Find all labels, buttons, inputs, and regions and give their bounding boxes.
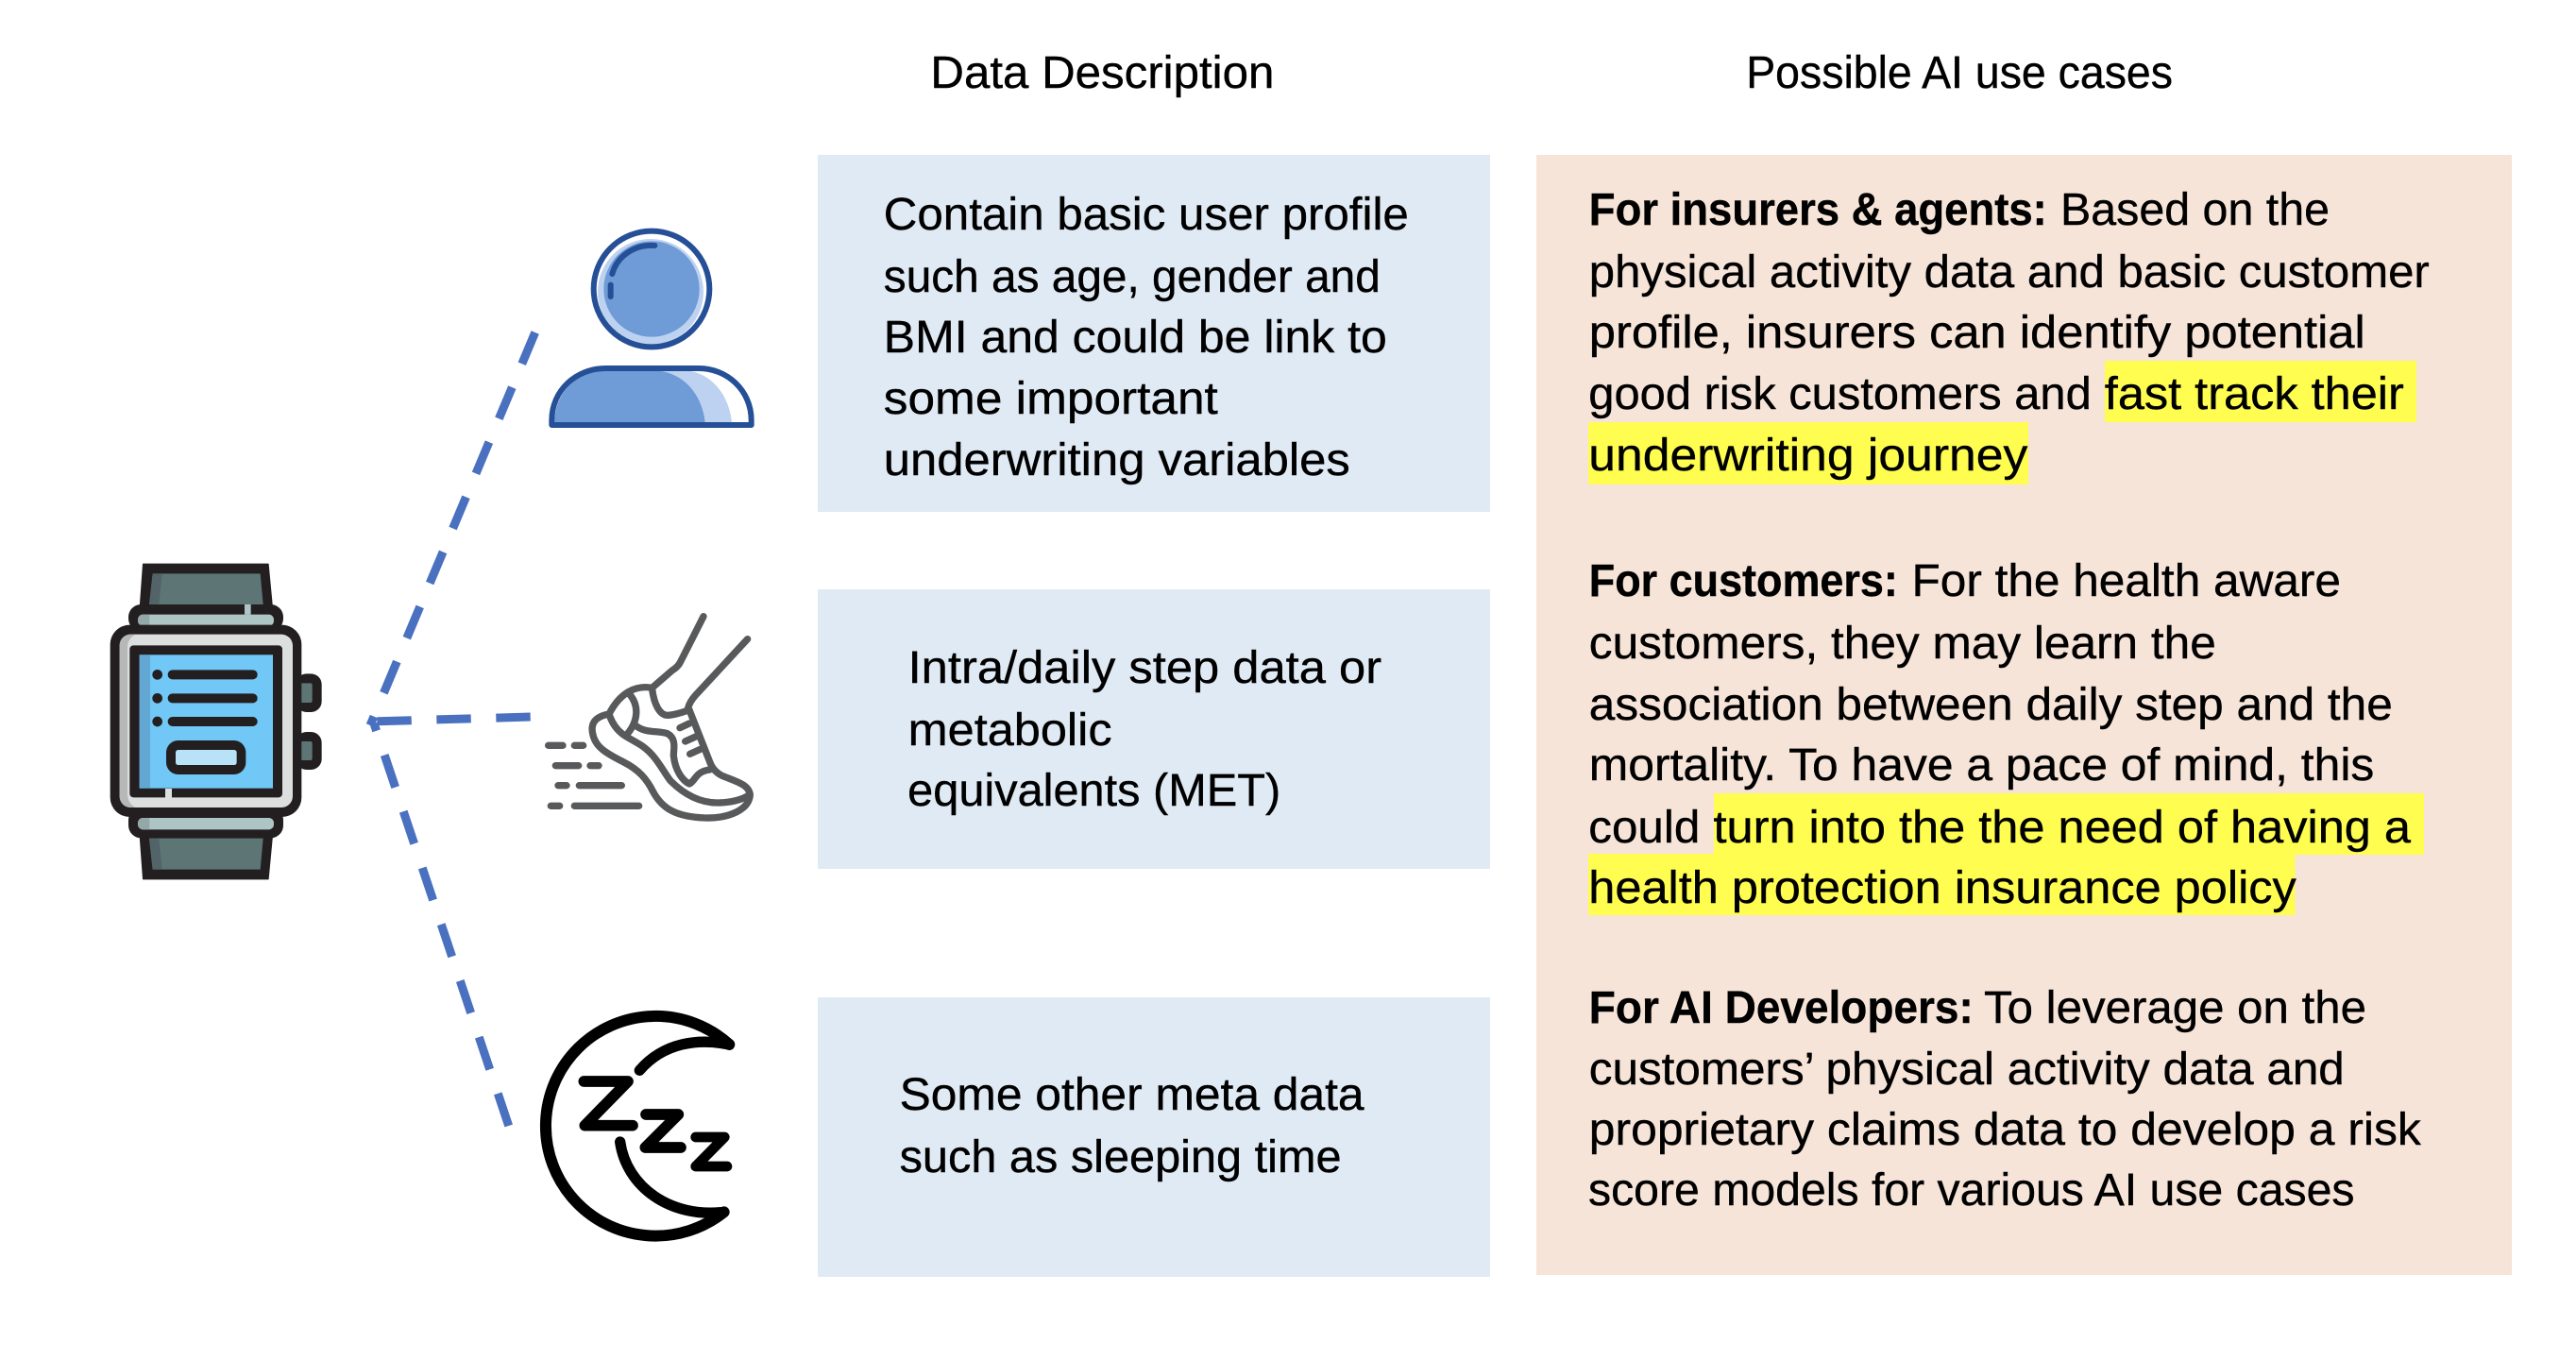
panel: meta data description	[818, 997, 1490, 1277]
panel: user profile description: BMI and could be link to	[884, 312, 1387, 363]
icon: running shoe	[549, 617, 750, 818]
text block: for insurers and agents: underwriting journey	[1588, 430, 2028, 481]
panel: step data description: metabolic	[908, 705, 1112, 756]
panel: user profile description: underwriting variables	[884, 434, 1350, 485]
icon: smartwatch	[110, 564, 322, 879]
panel: possible AI use cases	[1536, 155, 2512, 1275]
panel: step data description: equivalents (MET)	[907, 765, 1280, 816]
text block: for customers: association between daily step and the	[1589, 679, 2393, 730]
panel: step data description: Intra/daily step data or	[908, 642, 1381, 693]
heading: Possible AI use cases: Possible AI use cases	[1746, 47, 2173, 98]
text block: for AI developers: proprietary claims data to develop a risk	[1589, 1104, 2422, 1155]
panel: user profile description: such as age, gender and	[884, 251, 1381, 302]
text block: for customers: For customers:	[1589, 555, 1898, 606]
text block: for insurers and agents: physical activity data and basic customer	[1589, 246, 2430, 298]
panel: meta data description: such as sleeping time	[900, 1131, 1342, 1182]
text block: for AI developers: For AI Developers:	[1589, 982, 1974, 1033]
icon: sleeping moon	[546, 1016, 729, 1236]
text block: for insurers and agents	[1588, 184, 2430, 484]
panel: user profile description: some important	[884, 373, 1218, 424]
text block: for AI developers: customers’ physical activity data and	[1589, 1044, 2345, 1095]
text block: for insurers and agents: Based on the	[2060, 184, 2330, 235]
text block: for insurers and agents: fast track their	[2105, 368, 2404, 419]
heading: Data Description: Data Description	[930, 47, 1274, 98]
text block: for insurers and agents: profile, insurers can identify potential	[1589, 307, 2365, 358]
text block: for AI developers	[1588, 982, 2422, 1216]
text block: for customers: turn into the the need of having a	[1713, 802, 2411, 853]
text block: for customers: could	[1588, 802, 1700, 853]
text block: for customers: mortality. To have a pace of mind, this	[1589, 740, 2374, 790]
text block: for customers	[1588, 555, 2424, 915]
panel: user profile description	[818, 155, 1490, 512]
text block: for AI developers: score models for various AI use cases	[1588, 1164, 2355, 1216]
text block: for insurers and agents: good risk customers and	[1588, 368, 2092, 419]
text block: for AI developers: To leverage on the	[1984, 982, 2366, 1033]
text block: for customers: health protection insurance policy	[1588, 862, 2297, 913]
panel: meta data description: Some other meta data	[900, 1069, 1364, 1120]
text block: for customers: For the health aware	[1911, 555, 2341, 606]
icon: user profile	[551, 231, 752, 425]
connector: dashed lines from watch to data icons	[370, 332, 535, 1126]
text block: for customers: customers, they may learn the	[1589, 618, 2216, 669]
panel: step data description	[818, 589, 1490, 869]
panel: user profile description: Contain basic user profile	[884, 189, 1409, 240]
text block: for insurers and agents: For insurers & agents:	[1589, 184, 2047, 235]
